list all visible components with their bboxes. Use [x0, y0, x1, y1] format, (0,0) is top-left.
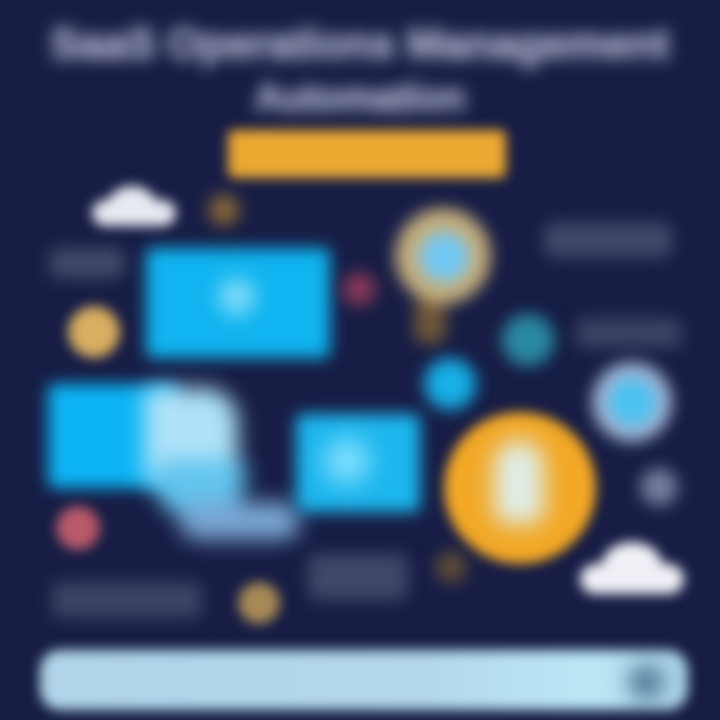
icon: pale document with base: [128, 370, 314, 556]
panel: blue monitor centre: [296, 414, 420, 512]
label: centre bottom text block: [308, 554, 408, 600]
title: SaaS Operations Management: [51, 20, 669, 68]
icon: white cloud top left: [83, 176, 185, 236]
icon: orange dot with pale centre left: [68, 306, 120, 358]
icon: blue node: [424, 358, 476, 410]
label: bottom left text block: [52, 582, 202, 618]
icon: centre monitor glyph: [324, 438, 370, 484]
panel: blue monitor left: [48, 384, 178, 488]
icon: magnifier circle: [384, 196, 502, 353]
icon: monitor centre glyph: [218, 278, 256, 316]
icon: small brown node: [435, 551, 467, 583]
panel: large blue monitor: [146, 248, 330, 358]
title: Automation: [254, 77, 466, 119]
icon: teal node: [502, 314, 554, 366]
label: top right text block: [544, 222, 672, 258]
icon: pale blue circle right: [580, 351, 684, 454]
label: middle right text block: [576, 318, 682, 348]
icon: orange node bottom: [238, 582, 280, 624]
label: left text block: [50, 248, 124, 278]
icon: grey node right: [640, 468, 678, 506]
icon: pink node: [342, 272, 376, 306]
orange subtitle banner: [228, 130, 506, 178]
icon: white cloud bottom right: [571, 532, 693, 604]
icon: large orange circle with bulb: [434, 402, 606, 574]
icon: pink node bottom left: [56, 506, 100, 550]
icon: bottom banner button: [628, 664, 664, 700]
icon: small orange node top: [208, 194, 240, 226]
title: [42, 17, 679, 122]
bottom banner bar: [40, 650, 688, 710]
